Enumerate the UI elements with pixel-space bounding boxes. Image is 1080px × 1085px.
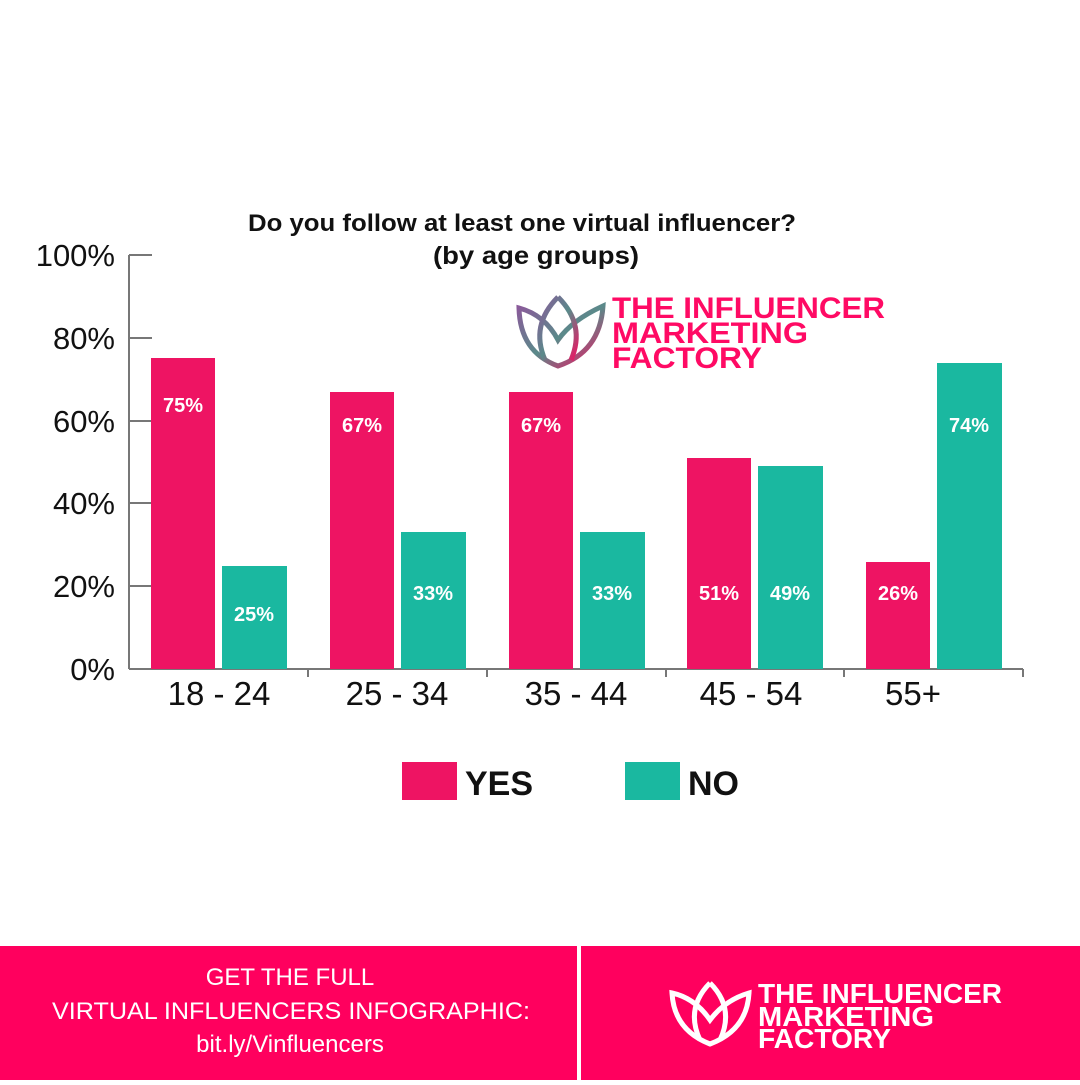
footer logo: MARKETING bbox=[758, 1001, 934, 1032]
bar value labels: 49% bbox=[770, 583, 810, 605]
chart title: (by age groups) bbox=[433, 242, 639, 270]
bar value labels: 33% bbox=[592, 583, 632, 605]
footer text: GET THE FULL bbox=[206, 964, 374, 991]
x axis labels: 35 - 44 bbox=[525, 675, 627, 712]
legend: NO bbox=[688, 765, 739, 803]
bar value labels bbox=[163, 395, 989, 626]
bar value labels: 67% bbox=[521, 415, 561, 437]
legend: YES bbox=[465, 765, 533, 803]
y axis labels: 80% bbox=[53, 321, 115, 356]
logo: chart bbox=[519, 292, 885, 375]
footer band bbox=[0, 946, 1080, 1080]
bar value labels: 74% bbox=[949, 415, 989, 437]
bar value labels: 75% bbox=[163, 395, 203, 417]
logo: chart: MARKETING bbox=[612, 317, 808, 350]
footer text: VIRTUAL INFLUENCERS INFOGRAPHIC: bbox=[52, 998, 530, 1025]
y axis labels: 100% bbox=[36, 238, 115, 273]
y axis labels: 20% bbox=[53, 569, 115, 604]
footer logo: THE INFLUENCER bbox=[758, 978, 1002, 1009]
bars bbox=[151, 358, 1002, 669]
y axis labels: 0% bbox=[70, 652, 115, 687]
bar value labels: 51% bbox=[699, 583, 739, 605]
x axis labels: 55+ bbox=[885, 675, 941, 712]
footer text: bit.ly/Vinfluencers bbox=[196, 1031, 384, 1058]
y axis labels bbox=[36, 238, 115, 687]
chart title: Do you follow at least one virtual influencer? bbox=[248, 210, 796, 237]
footer text bbox=[52, 964, 530, 1058]
x axis labels bbox=[168, 675, 941, 712]
footer logo bbox=[672, 978, 1002, 1054]
bar value labels: 26% bbox=[878, 583, 918, 605]
logo: chart: FACTORY bbox=[612, 342, 762, 375]
x axis labels: 18 - 24 bbox=[168, 675, 270, 712]
footer logo: FACTORY bbox=[758, 1023, 891, 1054]
y axis labels: 60% bbox=[53, 404, 115, 439]
logo: chart: THE INFLUENCER bbox=[612, 292, 885, 325]
x axis labels: 25 - 34 bbox=[346, 675, 448, 712]
y axis bbox=[129, 255, 1023, 677]
x axis labels: 45 - 54 bbox=[700, 675, 802, 712]
bar value labels: 67% bbox=[342, 415, 382, 437]
y axis labels: 40% bbox=[53, 486, 115, 521]
bar value labels: 33% bbox=[413, 583, 453, 605]
bar value labels: 25% bbox=[234, 604, 274, 626]
chart title bbox=[248, 210, 796, 270]
legend bbox=[402, 762, 739, 803]
